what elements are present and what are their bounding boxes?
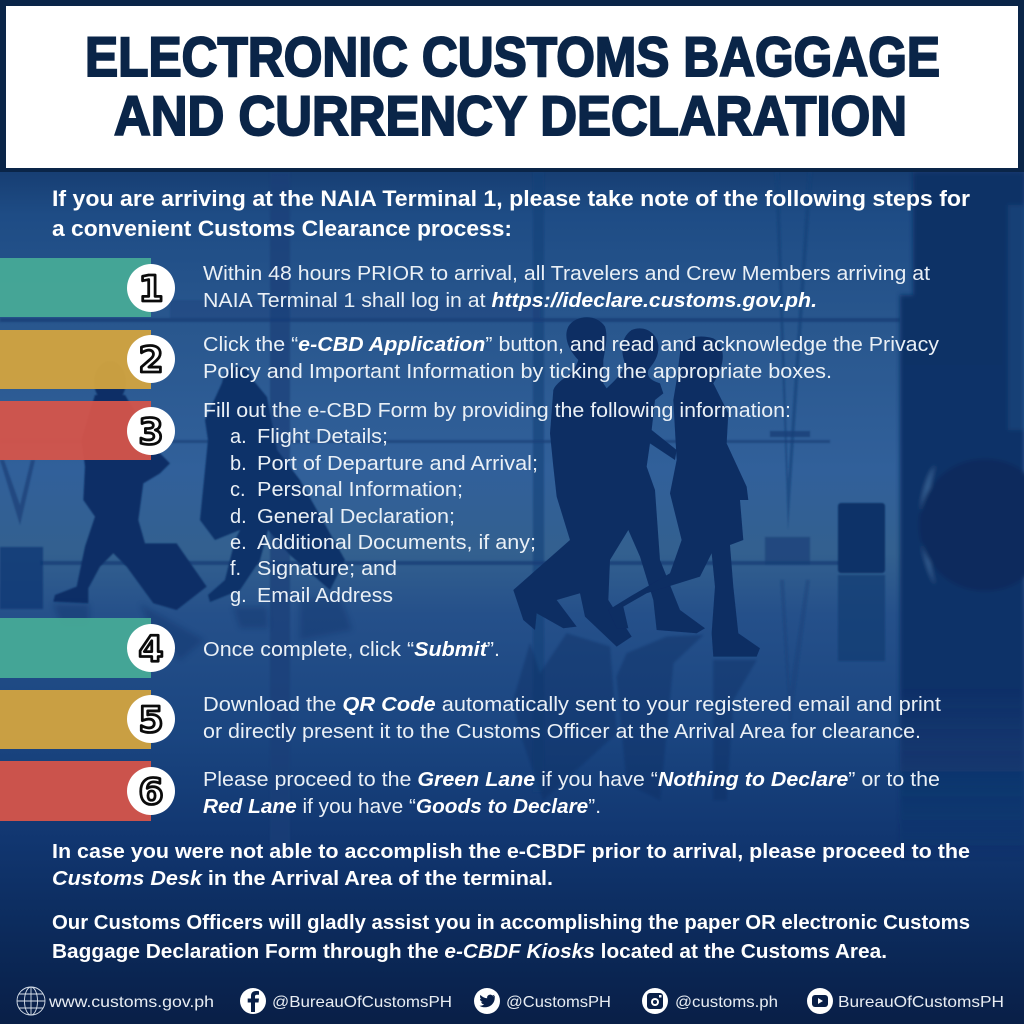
step 3 text and list: Personal Information; (257, 479, 463, 501)
step 3 (0, 400, 791, 607)
step 6 text: Please proceed to the Green Lane if you have “ Nothing to Declare ” or to the (203, 769, 940, 791)
instagram handle (642, 988, 778, 1014)
step 3 text and list: d. (230, 506, 247, 528)
step 5 (0, 690, 941, 749)
closing note: kiosks (52, 912, 970, 963)
step 6 bar (0, 761, 151, 821)
title text (85, 25, 940, 147)
silhouette: traveller with suitcase (53, 361, 207, 610)
twitter handle: @CustomsPH (506, 994, 611, 1011)
step 3 bar (0, 401, 151, 460)
step 1 number badge: 1 (138, 269, 164, 310)
closing note: kiosks: Our Customs Officers will gladly assist you in accomplishing the paper OR electronic Customs (52, 912, 970, 934)
step 3 text and list: c. (230, 479, 246, 501)
step 5 text: Download the QR Code automatically sent to your registered email and print (203, 694, 941, 716)
step 4 bar (0, 618, 151, 678)
step 3 number badge: 3 (138, 412, 164, 453)
silhouette: second traveller (200, 367, 345, 602)
step 5 text: or directly present it to the Customs Officer at the Arrival Area for clearance. (203, 721, 921, 743)
intro text: a convenient Customs Clearance process: (52, 216, 512, 241)
title text: AND CURRENCY DECLARATION (114, 84, 907, 147)
step 1 text: NAIA Terminal 1 shall log in at https://ideclare.customs.gov.ph. (203, 290, 817, 312)
step 6 (0, 761, 940, 821)
intro text (52, 186, 970, 241)
intro text: If you are arriving at the NAIA Terminal 1, please take note of the following steps for (52, 186, 970, 211)
step 6 number badge: 6 (138, 772, 164, 813)
title banner (0, 0, 1024, 172)
website link: www.customs.gov.ph (48, 994, 214, 1011)
step 3 text and list: General Declaration; (257, 506, 455, 528)
step 1 bar (0, 258, 151, 317)
kiosk box and reflection (838, 503, 885, 661)
step 3 text and list: Fill out the e-CBD Form by providing the following information: (203, 400, 791, 422)
icon: youtube (807, 988, 833, 1014)
step 6 text (203, 769, 940, 818)
step 3 text and list: g. (230, 585, 247, 607)
step 5 number badge: 5 (138, 700, 164, 741)
footer (17, 987, 1004, 1015)
closing note: customs desk (52, 841, 970, 890)
title text: ELECTRONIC CUSTOMS BAGGAGE (85, 25, 940, 88)
step 1 text: Within 48 hours PRIOR to arrival, all Travelers and Crew Members arriving at (203, 263, 930, 285)
silhouette: walking group (513, 317, 760, 657)
step 2 text: Policy and Important Information by ticking the appropriate boxes. (203, 361, 832, 383)
step 3 text and list: Flight Details; (257, 426, 388, 448)
step 1 (0, 258, 930, 317)
step 3 text and list: e. (230, 532, 247, 554)
step 5 number badge (127, 695, 175, 743)
step 3 text and list: Additional Documents, if any; (257, 532, 536, 554)
step 4 (0, 618, 500, 678)
twitter handle (474, 988, 611, 1014)
step 3 text and list: a. (230, 426, 247, 448)
step 3 text and list: b. (230, 453, 247, 475)
icon: twitter (474, 988, 500, 1014)
step 2 number badge: 2 (138, 340, 164, 381)
step 3 number badge (127, 407, 175, 455)
step 4 number badge: 4 (138, 629, 164, 670)
step 1 number badge (127, 264, 175, 312)
step 2 bar (0, 330, 151, 389)
step 6 number badge (127, 767, 175, 815)
step 4 number badge (127, 624, 175, 672)
step 1 text (203, 263, 930, 312)
step 2 text (203, 334, 939, 383)
instagram handle: @customs.ph (675, 994, 778, 1011)
step 2 number badge (127, 335, 175, 383)
floor reflections: walking group (513, 633, 757, 800)
step 5 bar (0, 690, 151, 749)
website link (17, 987, 214, 1015)
step 6 text: Red Lane if you have “Goods to Declare ”. (203, 796, 601, 818)
window frame structure (0, 172, 900, 852)
step 4 text: Once complete, click “ Submit”. (203, 639, 500, 661)
step 2 text: Click the “ e-CBD Application ” button, and read and acknowledge the Privacy (203, 334, 939, 356)
closing note: customs desk: In case you were not able to accomplish the e-CBDF prior to arrival, please proceed to the (52, 841, 970, 863)
youtube handle (807, 988, 1004, 1014)
step 3 text and list: Port of Departure and Arrival; (257, 453, 538, 475)
step 2 (0, 330, 939, 389)
facebook handle (240, 988, 452, 1014)
icon: instagram (642, 988, 668, 1014)
icon: facebook (240, 988, 266, 1014)
closing note: customs desk: Customs Desk in the Arrival Area of the terminal. (52, 868, 553, 890)
closing note: kiosks: Baggage Declaration Form through the e-CBDF Kiosks located at the Customs Area. (52, 941, 887, 963)
step 3 text and list: Email Address (257, 585, 393, 607)
icon: globe (17, 987, 45, 1015)
floor reflections: left travellers (53, 595, 352, 660)
step 5 text (203, 694, 941, 743)
step 3 text and list (203, 400, 791, 607)
facebook handle: @BureauOfCustomsPH (272, 994, 452, 1011)
youtube handle: BureauOfCustomsPH (838, 994, 1004, 1011)
dark structure at right (900, 172, 1024, 860)
step 3 text and list: Signature; and (257, 558, 397, 580)
step 3 text and list: f. (230, 558, 241, 580)
